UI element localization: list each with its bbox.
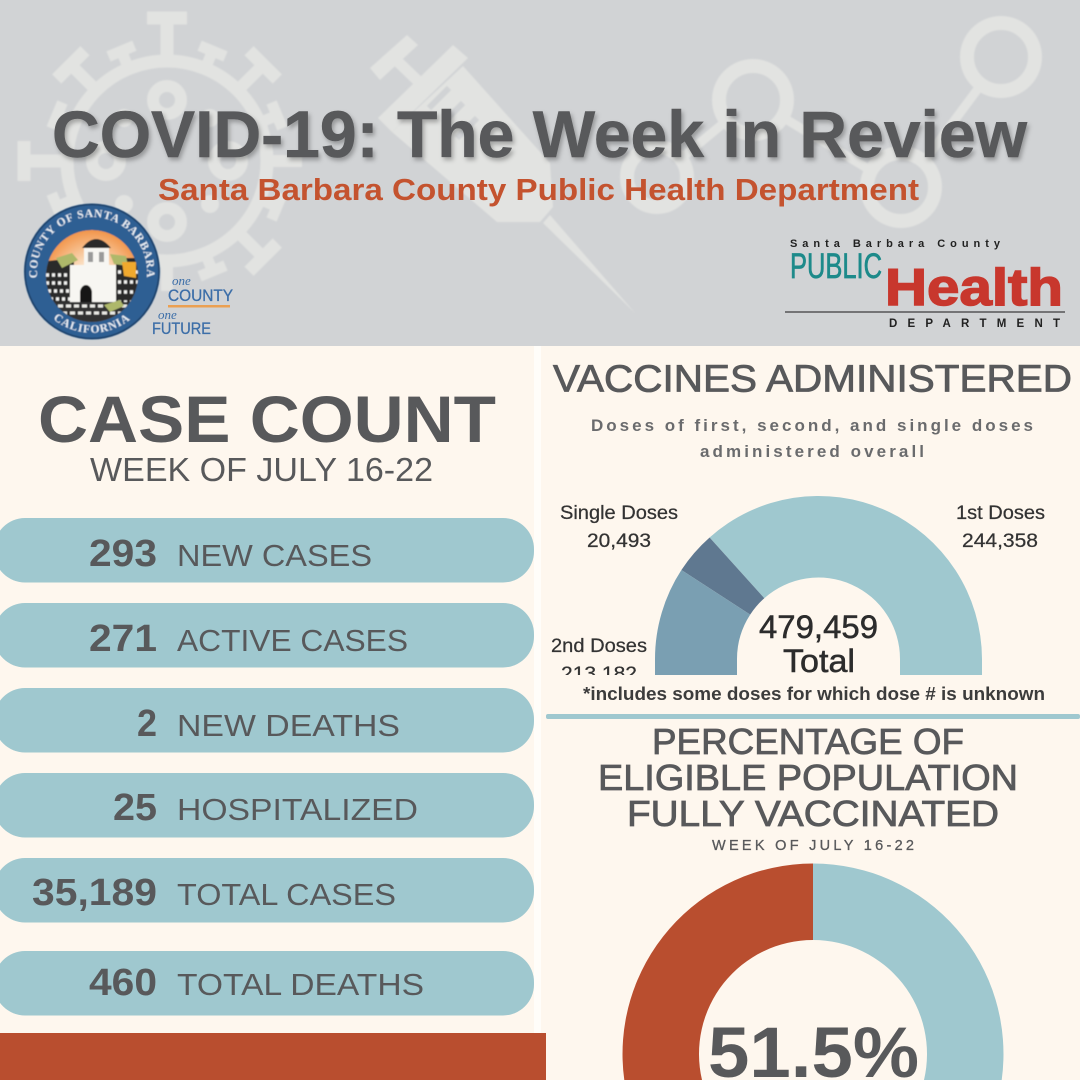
label: 2nd doses (552, 638, 646, 675)
footnote: *includes some doses for which dose # is unknown (583, 684, 1045, 704)
logo: county seal (23, 202, 161, 340)
stat: new deaths: NEW DEATHS (177, 708, 400, 743)
heading: vaccines administered: VACCINES ADMINISTERED (553, 358, 1072, 400)
segment: fully vaccinated (813, 864, 1003, 1080)
label: total: 479,459 (759, 609, 878, 645)
chart: vaccine doses half donut (551, 496, 982, 690)
segment: not vaccinated (623, 864, 813, 1080)
stat: total deaths: 460 (89, 962, 157, 1004)
panel: case count (0, 382, 534, 1016)
logo: one county one future: FUTURE (152, 319, 211, 338)
panel divider (534, 346, 541, 1033)
label: 2nd doses: 213,182 (561, 664, 637, 685)
stat: hospitalized: 25 (113, 787, 157, 829)
stat: active cases: ACTIVE CASES (177, 623, 408, 658)
stat: total cases: TOTAL CASES (177, 877, 396, 912)
icon: virus watermark (24, 18, 302, 291)
stat: total deaths: TOTAL DEATHS (177, 967, 424, 1002)
subtitle: Santa Barbara County Public Health Department (158, 172, 919, 207)
label: total (760, 615, 877, 672)
label: single doses (560, 503, 678, 552)
label: 1st doses: 244,358 (962, 531, 1038, 552)
stat: hospitalized (0, 773, 534, 838)
stat: hospitalized: HOSPITALIZED (177, 792, 418, 827)
logo: public health department: PUBLIC (790, 247, 882, 286)
header banner (0, 0, 1080, 346)
logo: one county one future (152, 273, 233, 338)
panel: vaccines administered (551, 358, 1072, 704)
stat: total cases (0, 858, 534, 922)
subheading: week: WEEK OF JULY 16-22 (712, 838, 914, 854)
heading: percentage: PERCENTAGE OF (652, 721, 964, 762)
label: 2nd doses: 2nd Doses (551, 636, 647, 657)
label: 1st doses: 1st Doses (956, 503, 1045, 524)
label: single doses: Single Doses (560, 503, 678, 524)
segment: 2nd doses (655, 570, 750, 675)
logo: one county one future: one (158, 307, 177, 322)
stat: new cases: 293 (89, 533, 157, 575)
segment: 1st doses (710, 496, 982, 690)
logo: public health department: DEPARTMENT (889, 318, 1060, 330)
logo: one county one future: COUNTY (168, 286, 233, 305)
heading: percentage: ELIGIBLE POPULATION (598, 757, 1018, 798)
heading: percentage: FULLY VACCINATED (627, 793, 999, 834)
stat: total deaths (0, 951, 534, 1016)
label: 1st doses (956, 503, 1045, 552)
seal lettering (28, 208, 156, 334)
seal lettering: COUNTY OF SANTA BARBARA (28, 208, 156, 278)
logo: public health department (785, 238, 1065, 330)
stat: new cases: NEW CASES (177, 538, 372, 573)
subheading: week: WEEK OF JULY 16-22 (90, 451, 433, 488)
footer bar (0, 1033, 546, 1080)
label: single doses: 20,493 (587, 531, 651, 552)
description (591, 416, 1033, 461)
stat: active cases (0, 603, 534, 668)
stat: active cases: 271 (89, 618, 157, 660)
stat: new deaths (0, 688, 534, 752)
panel: percentage fully vaccinated (598, 721, 1018, 1080)
description: administered overall (700, 442, 924, 461)
heading: case count: CASE COUNT (38, 382, 496, 456)
stat: new deaths: 2 (137, 703, 157, 745)
stat: total cases: 35,189 (32, 872, 157, 914)
title: COVID-19: The Week in Review (52, 97, 1028, 171)
logo: one county one future: one (172, 273, 191, 288)
label: total: Total (783, 643, 855, 679)
heading: percentage (598, 721, 1018, 834)
stat: new cases (0, 518, 534, 582)
icon: molecule watermark (627, 23, 1035, 221)
description: Doses of first, second, and single doses (591, 416, 1033, 435)
logo: public health department: Health (885, 259, 1063, 317)
icon: syringe watermark (370, 35, 635, 313)
segment: single doses (681, 538, 764, 615)
section divider (546, 714, 1080, 719)
seal lettering: CALIFORNIA (54, 314, 131, 334)
logo: public health department: Santa Barbara County (790, 238, 1001, 250)
chart: percent donut (623, 864, 1003, 1080)
